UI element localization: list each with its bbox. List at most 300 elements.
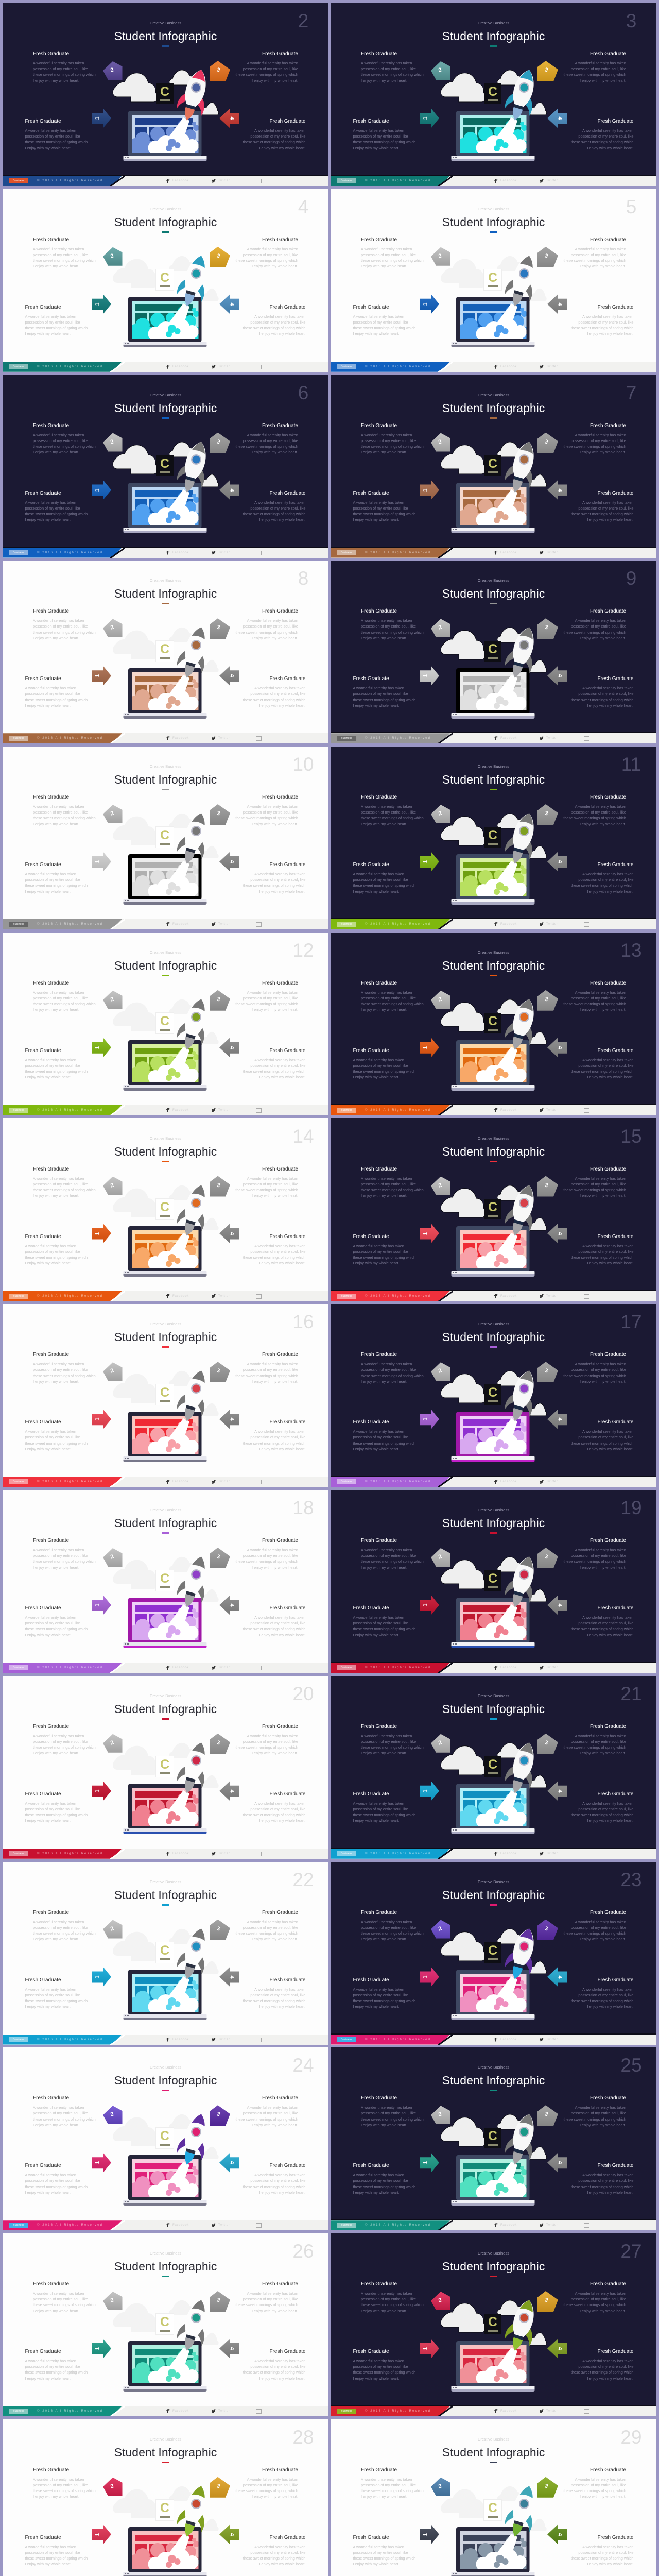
- text: top right: [235, 980, 298, 1013]
- text: bottom left: possession of my entire soul, like: [353, 2550, 408, 2555]
- badge 3: 3: [216, 1553, 221, 1561]
- accent bar: [490, 1160, 497, 1162]
- logo: C: [160, 1199, 169, 1214]
- footer: Facebook: [172, 551, 189, 554]
- text: bottom left: Fresh Graduate: [25, 1419, 61, 1425]
- badge 3: [537, 618, 558, 639]
- text: top right: [235, 51, 298, 83]
- text: top left: A wonderful serenity has taken: [361, 618, 412, 623]
- text: top right: I enjoy with my whole heart.: [580, 2309, 626, 2313]
- text: bottom right: I enjoy with my whole heart.: [587, 2376, 633, 2381]
- accent bar: [162, 1718, 169, 1720]
- text: top right: I enjoy with my whole heart.: [580, 1751, 626, 1755]
- text: top right: [563, 1538, 626, 1570]
- logo: C: [488, 1571, 497, 1586]
- footer: © 2016 All Rights Reserved: [365, 1109, 431, 1112]
- text: top left: I enjoy with my whole heart.: [33, 1751, 79, 1755]
- text: top left: Fresh Graduate: [361, 608, 397, 614]
- text: bottom left: I enjoy with my whole heart.: [25, 1818, 72, 1823]
- panel: slide 17: [331, 1304, 656, 1487]
- badge 1: 1: [95, 2347, 101, 2350]
- kicker: Creative Business: [150, 764, 181, 769]
- text: bottom left: Fresh Graduate: [25, 676, 61, 682]
- logo: C: [488, 2315, 497, 2329]
- text: top right: Fresh Graduate: [590, 1166, 626, 1172]
- badge 3: [537, 2477, 558, 2498]
- panel: slide 29: [331, 2419, 656, 2576]
- badge 4: 4: [557, 1418, 563, 1421]
- text: bottom right: A wonderful serenity has taken: [582, 2545, 633, 2549]
- text: bottom right: Fresh Graduate: [597, 2349, 633, 2354]
- text: bottom right: these sweet mornings of spring which: [243, 2556, 306, 2561]
- text: top right: I enjoy with my whole heart.: [580, 1565, 626, 1570]
- badge 2: 2: [438, 1553, 443, 1561]
- badge 4: [219, 666, 239, 686]
- text: top right: Fresh Graduate: [262, 1538, 298, 1544]
- badge 3: 3: [216, 2111, 221, 2118]
- panel: slide 28: [3, 2419, 328, 2576]
- badge 3: [537, 2105, 558, 2126]
- panel: slide 9: [331, 561, 656, 743]
- text: bottom right: I enjoy with my whole heart.: [259, 703, 306, 708]
- text: top left: A wonderful serenity has taken: [33, 618, 84, 623]
- footer: [331, 176, 656, 186]
- panel: slide 2: [3, 3, 328, 186]
- text: bottom right: I enjoy with my whole heart.: [587, 146, 633, 150]
- text: top right: A wonderful serenity has taken: [575, 1920, 626, 1924]
- text: top right: I enjoy with my whole heart.: [252, 822, 298, 826]
- text: top right: [563, 980, 626, 1013]
- footer: Facebook: [172, 2410, 189, 2413]
- text: bottom left: A wonderful serenity has taken: [25, 128, 76, 133]
- text: top left: A wonderful serenity has taken: [33, 433, 84, 437]
- text: bottom left: [353, 1605, 415, 1638]
- text: bottom right: these sweet mornings of spring which: [243, 1812, 306, 1817]
- text: bottom right: I enjoy with my whole heart.: [259, 2004, 306, 2009]
- text: bottom left: [353, 1419, 415, 1452]
- text: bottom right: Fresh Graduate: [597, 676, 633, 682]
- text: bottom right: I enjoy with my whole heart.: [587, 1633, 633, 1637]
- text: bottom right: A wonderful serenity has taken: [582, 1429, 633, 1434]
- text: top left: [361, 2281, 424, 2314]
- badge 4: [219, 1223, 239, 1244]
- text: bottom left: A wonderful serenity has taken: [25, 1801, 76, 1806]
- text: top left: I enjoy with my whole heart.: [33, 1565, 79, 1570]
- logo: [156, 455, 174, 476]
- text: top right: these sweet mornings of spring which: [563, 444, 626, 449]
- footer: Business: [13, 1109, 24, 1112]
- panel: slide 23: [331, 1862, 656, 2044]
- text: bottom left: these sweet mornings of spring which: [25, 326, 88, 330]
- text: bottom right: possession of my entire soul, like: [250, 2178, 306, 2183]
- text: bottom left: [25, 1605, 88, 1638]
- text: bottom left: [25, 304, 88, 336]
- footer: [331, 1663, 656, 1673]
- text: top right: these sweet mornings of spring which: [235, 1374, 298, 1378]
- text: bottom right: possession of my entire soul, like: [578, 1063, 633, 1068]
- footer: Facebook: [500, 2224, 517, 2227]
- badge 2: [431, 2478, 450, 2496]
- title: Student Infographic: [442, 215, 545, 229]
- text: top left: I enjoy with my whole heart.: [33, 78, 79, 83]
- text: bottom right: I enjoy with my whole heart.: [259, 1261, 306, 1265]
- text: bottom left: I enjoy with my whole heart.: [353, 1447, 400, 1451]
- slide number: 13: [620, 940, 642, 961]
- text: top right: [235, 2095, 298, 2128]
- accent bar: [162, 1532, 169, 1534]
- text: top right: these sweet mornings of spring which: [235, 72, 298, 77]
- text: bottom left: I enjoy with my whole heart.: [25, 1261, 72, 1265]
- slide number: 9: [626, 568, 636, 589]
- footer: © 2016 All Rights Reserved: [365, 1666, 431, 1669]
- badge 1: [92, 108, 111, 128]
- illustration: rocket and laptop: [3, 933, 328, 1115]
- footer: © 2016 All Rights Reserved: [365, 1480, 431, 1483]
- text: bottom left: I enjoy with my whole heart.: [25, 146, 72, 150]
- logo: [156, 641, 174, 662]
- text: bottom right: these sweet mornings of spring which: [571, 2370, 633, 2375]
- text: top left: [361, 51, 424, 83]
- text: bottom left: these sweet mornings of spring which: [353, 140, 415, 144]
- badge 4: [547, 294, 567, 314]
- text: bottom left: I enjoy with my whole heart.: [353, 146, 400, 150]
- footer: © 2016 All Rights Reserved: [365, 2410, 431, 2413]
- badge 4: [547, 1967, 567, 1987]
- footer: Facebook: [500, 1109, 517, 1112]
- text: top right: possession of my entire soul, like: [571, 1925, 626, 1930]
- badge 2: 2: [438, 438, 443, 445]
- text: top left: these sweet mornings of spring which: [33, 816, 96, 820]
- kicker: Creative Business: [150, 1321, 181, 1326]
- badge 4: 4: [229, 1046, 235, 1049]
- badge 4: 4: [557, 860, 563, 863]
- text: bottom left: Fresh Graduate: [353, 1048, 389, 1054]
- panel: slide 6: [3, 375, 328, 557]
- text: top left: I enjoy with my whole heart.: [361, 822, 407, 826]
- text: bottom left: possession of my entire soul, like: [353, 506, 408, 511]
- text: bottom right: these sweet mornings of spring which: [571, 1255, 633, 1260]
- footer: Business: [13, 1666, 24, 1669]
- badge 1: [92, 1781, 111, 1801]
- text: top right: Fresh Graduate: [590, 51, 626, 57]
- text: top left: these sweet mornings of spring which: [361, 1745, 424, 1750]
- badge 4: [547, 2153, 567, 2173]
- text: top left: Fresh Graduate: [33, 1724, 69, 1730]
- text: top right: [563, 237, 626, 268]
- text: bottom left: Fresh Graduate: [25, 2349, 61, 2354]
- illustration: rocket and laptop: [441, 256, 547, 347]
- text: bottom right: [571, 304, 633, 336]
- illustration: rocket and laptop: [331, 1304, 656, 1487]
- badge 3: [210, 433, 230, 453]
- text: top right: these sweet mornings of spring which: [563, 1374, 626, 1378]
- badge 4: [219, 480, 239, 500]
- text: bottom right: these sweet mornings of spring which: [571, 1812, 633, 1817]
- text: bottom right: [571, 2349, 633, 2381]
- text: bottom left: Fresh Graduate: [353, 490, 389, 496]
- text: top left: possession of my entire soul, like: [361, 2111, 416, 2115]
- text: top left: possession of my entire soul, like: [361, 252, 416, 257]
- badge 2: [431, 1734, 450, 1753]
- text: bottom right: possession of my entire soul, like: [578, 506, 633, 511]
- slide number: 10: [292, 754, 314, 775]
- logo: C: [488, 84, 497, 99]
- text: bottom left: these sweet mornings of spring which: [353, 1812, 415, 1817]
- badge 4: [547, 480, 567, 500]
- text: top left: Fresh Graduate: [33, 422, 69, 429]
- text: top left: these sweet mornings of spring which: [33, 1931, 96, 1936]
- text: bottom left: possession of my entire soul, like: [25, 1807, 80, 1811]
- badge 2: [103, 619, 123, 637]
- badge 2: 2: [110, 1368, 115, 1375]
- text: top left: I enjoy with my whole heart.: [33, 450, 79, 454]
- text: bottom left: A wonderful serenity has taken: [353, 1429, 404, 1434]
- illustration: rocket and laptop: [331, 747, 656, 929]
- text: bottom right: Fresh Graduate: [269, 2163, 306, 2168]
- illustration: rocket and laptop: [331, 933, 656, 1115]
- footer: Business: [13, 1480, 24, 1483]
- text: top right: possession of my entire soul, like: [571, 2111, 626, 2115]
- footer: Business: [13, 923, 24, 926]
- kicker: Creative Business: [150, 950, 181, 955]
- text: bottom right: A wonderful serenity has taken: [254, 872, 306, 876]
- badge 3: [210, 804, 230, 825]
- kicker: Creative Business: [150, 1879, 181, 1884]
- text: top left: I enjoy with my whole heart.: [33, 1007, 79, 1012]
- text: top left: [361, 1166, 424, 1198]
- text: bottom right: Fresh Graduate: [597, 2535, 633, 2540]
- text: top right: A wonderful serenity has taken: [247, 1362, 298, 1366]
- accent bar: [162, 1160, 169, 1162]
- text: bottom left: [25, 862, 88, 894]
- text: top right: I enjoy with my whole heart.: [580, 78, 626, 83]
- text: top right: Fresh Graduate: [262, 422, 298, 429]
- text: top left: these sweet mornings of spring which: [361, 816, 424, 820]
- text: top right: [235, 1352, 298, 1384]
- text: top left: [33, 794, 96, 827]
- badge 4: 4: [229, 488, 235, 492]
- badge 3: 3: [216, 438, 221, 445]
- badge 1: 1: [95, 1418, 101, 1421]
- kicker: Creative Business: [150, 2251, 181, 2256]
- logo: C: [488, 270, 497, 285]
- text: top left: Fresh Graduate: [361, 1166, 397, 1172]
- text: bottom right: [243, 2349, 306, 2381]
- text: top left: [361, 422, 424, 455]
- text: top left: Fresh Graduate: [33, 1909, 69, 1916]
- badge 2: 2: [438, 810, 443, 817]
- text: bottom left: I enjoy with my whole heart.: [25, 703, 72, 708]
- text: top right: possession of my entire soul, like: [243, 2111, 298, 2115]
- text: top right: I enjoy with my whole heart.: [252, 2309, 298, 2313]
- footer: Business: [341, 1294, 352, 1297]
- kicker: Creative Business: [478, 578, 509, 583]
- text: bottom left: Fresh Graduate: [353, 2349, 389, 2354]
- text: bottom right: A wonderful serenity has taken: [254, 686, 306, 690]
- text: top left: these sweet mornings of spring which: [361, 1188, 424, 1192]
- text: top left: [361, 237, 424, 268]
- badge 3: [210, 61, 230, 81]
- text: top left: Fresh Graduate: [361, 2467, 397, 2473]
- slide number: 14: [292, 1125, 314, 1147]
- badge 1: 1: [95, 1046, 101, 1049]
- text: top right: A wonderful serenity has taken: [247, 433, 298, 437]
- text: top right: A wonderful serenity has taken: [575, 990, 626, 995]
- logo: [484, 1198, 501, 1219]
- badge 4: [547, 1038, 567, 1058]
- text: bottom left: [353, 862, 415, 894]
- text: bottom right: these sweet mornings of spring which: [571, 1626, 633, 1631]
- text: bottom left: I enjoy with my whole heart.: [25, 2190, 72, 2195]
- kicker: Creative Business: [478, 2437, 509, 2442]
- kicker: Creative Business: [150, 578, 181, 583]
- text: top left: these sweet mornings of spring which: [33, 444, 96, 449]
- text: top left: [33, 2095, 96, 2128]
- badge 3: 3: [544, 996, 549, 1003]
- footer: [331, 1477, 656, 1487]
- text: top right: [235, 1538, 298, 1570]
- illustration: rocket and laptop: [3, 2419, 328, 2576]
- badge 1: 1: [95, 1603, 101, 1607]
- text: bottom left: Fresh Graduate: [353, 1791, 389, 1797]
- badge 2: [103, 247, 123, 266]
- text: top right: possession of my entire soul, like: [243, 1367, 298, 1372]
- text: top right: these sweet mornings of spring which: [563, 2302, 626, 2307]
- text: bottom left: A wonderful serenity has taken: [25, 2359, 76, 2363]
- text: bottom left: [25, 2163, 88, 2195]
- text: top right: possession of my entire soul, like: [571, 996, 626, 1001]
- logo: [484, 269, 501, 290]
- text: top left: I enjoy with my whole heart.: [361, 1937, 407, 1941]
- text: top right: A wonderful serenity has taken: [247, 2291, 298, 2296]
- slide number: 26: [292, 2241, 314, 2262]
- text: top left: I enjoy with my whole heart.: [361, 1007, 407, 1012]
- badge 1: 1: [95, 860, 101, 863]
- badge 2: 2: [110, 1739, 115, 1746]
- text: top left: these sweet mornings of spring which: [361, 444, 424, 449]
- text: top right: possession of my entire soul, like: [243, 2297, 298, 2301]
- logo: [484, 827, 501, 848]
- text: top right: possession of my entire soul, like: [571, 1182, 626, 1187]
- text: top left: [33, 1166, 96, 1198]
- text: top left: [361, 1352, 424, 1384]
- badge 2: [103, 1548, 123, 1567]
- badge 3: [210, 247, 230, 267]
- text: top left: A wonderful serenity has taken: [361, 247, 412, 251]
- text: top right: A wonderful serenity has taken: [247, 1548, 298, 1552]
- text: bottom left: these sweet mornings of spring which: [353, 2184, 415, 2189]
- badge 4: [547, 1595, 567, 1615]
- slide number: 29: [620, 2427, 642, 2448]
- slide number: 15: [620, 1125, 642, 1147]
- text: bottom right: [571, 2163, 633, 2195]
- footer: Facebook: [172, 2038, 189, 2041]
- text: top left: possession of my entire soul, like: [361, 624, 416, 629]
- text: top right: I enjoy with my whole heart.: [252, 78, 298, 83]
- text: top left: these sweet mornings of spring which: [33, 630, 96, 635]
- text: top right: Fresh Graduate: [262, 1352, 298, 1358]
- logo: C: [488, 2501, 497, 2515]
- badge 3: [210, 2291, 230, 2312]
- text: top right: possession of my entire soul, like: [571, 66, 626, 71]
- badge 3: [210, 1362, 230, 1382]
- text: top left: A wonderful serenity has taken: [33, 804, 84, 809]
- title: Student Infographic: [114, 2074, 217, 2087]
- footer: Facebook: [172, 1480, 189, 1483]
- text: bottom left: these sweet mornings of spring which: [25, 1441, 88, 1446]
- footer: Twitter: [218, 2038, 230, 2041]
- text: top left: Fresh Graduate: [361, 980, 397, 986]
- logo: [484, 2500, 501, 2520]
- logo: [156, 2500, 174, 2520]
- illustration: rocket and laptop: [3, 561, 328, 743]
- text: top right: these sweet mornings of spring which: [563, 1745, 626, 1750]
- text: top left: possession of my entire soul, like: [33, 1739, 88, 1744]
- text: bottom right: Fresh Graduate: [597, 1605, 633, 1611]
- badge 3: 3: [216, 1925, 221, 1932]
- badge 2: 2: [438, 2483, 443, 2489]
- text: bottom right: these sweet mornings of spring which: [243, 512, 306, 516]
- text: top right: possession of my entire soul, like: [243, 252, 298, 257]
- panel: slide 24: [3, 2047, 328, 2230]
- title: Student Infographic: [114, 1702, 217, 1716]
- text: bottom right: I enjoy with my whole heart.: [259, 889, 306, 894]
- footer: Facebook: [172, 1109, 189, 1112]
- badge 3: [537, 1176, 558, 1196]
- badge 4: 4: [229, 1789, 235, 1792]
- badge 2: [431, 1362, 450, 1381]
- footer: Facebook: [500, 1852, 517, 1855]
- text: top left: these sweet mornings of spring which: [361, 1002, 424, 1006]
- badge 1: 1: [95, 488, 101, 492]
- badge 3: [210, 1920, 230, 1940]
- text: bottom right: I enjoy with my whole heart.: [587, 703, 633, 708]
- text: bottom left: [353, 1048, 415, 1080]
- text: top right: possession of my entire soul, like: [571, 2297, 626, 2301]
- footer: [331, 2034, 656, 2044]
- badge 3: [537, 804, 558, 825]
- footer: Business: [13, 1852, 24, 1855]
- text: top right: these sweet mornings of spring which: [235, 1559, 298, 1564]
- text: top right: possession of my entire soul, like: [571, 438, 626, 443]
- badge 3: 3: [544, 438, 549, 445]
- text: bottom right: A wonderful serenity has taken: [582, 1244, 633, 1248]
- accent bar: [162, 2276, 169, 2277]
- panel: slide 12: [3, 933, 328, 1115]
- text: bottom right: I enjoy with my whole heart.: [587, 889, 633, 894]
- text: top right: Fresh Graduate: [590, 794, 626, 800]
- badge 3: 3: [216, 2483, 221, 2489]
- text: top left: I enjoy with my whole heart.: [33, 2309, 79, 2313]
- text: top left: these sweet mornings of spring which: [361, 258, 424, 263]
- text: bottom left: Fresh Graduate: [25, 862, 61, 868]
- text: bottom right: I enjoy with my whole heart.: [259, 517, 306, 522]
- text: bottom right: possession of my entire soul, like: [250, 2550, 306, 2555]
- text: top left: A wonderful serenity has taken: [361, 990, 412, 995]
- text: bottom left: A wonderful serenity has taken: [353, 2359, 404, 2363]
- badge 3: 3: [216, 252, 221, 259]
- logo: C: [160, 1757, 169, 1772]
- badge 2: 2: [438, 624, 443, 631]
- text: top right: Fresh Graduate: [590, 608, 626, 614]
- kicker: Creative Business: [150, 1693, 181, 1698]
- text: bottom left: [353, 490, 415, 522]
- footer: Facebook: [500, 1666, 517, 1669]
- badge 4: 4: [229, 860, 235, 863]
- footer: Business: [341, 2038, 352, 2041]
- badge 4: 4: [557, 488, 563, 492]
- text: bottom right: possession of my entire soul, like: [250, 506, 306, 511]
